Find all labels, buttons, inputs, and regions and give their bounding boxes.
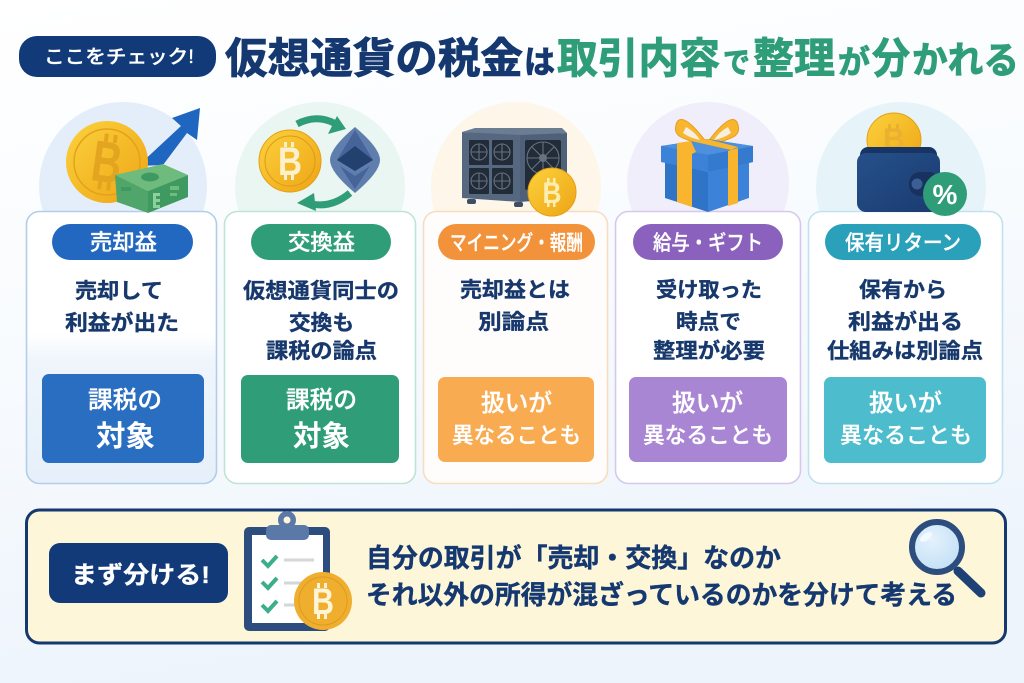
description: 整理が必要	[653, 339, 765, 363]
description: 受け取った	[656, 279, 762, 302]
tag: 給与・ギフト	[653, 232, 763, 255]
icon: exchange BTC and ETH	[259, 116, 380, 211]
icon: coin with rising arrow and cash	[66, 108, 200, 213]
result box: 異なることも	[452, 423, 581, 448]
icon: gift box	[661, 120, 753, 212]
icon: wallet with coin and percent: %	[933, 179, 958, 210]
description: 交換も	[289, 312, 354, 335]
icon: wallet with coin and percent	[857, 113, 967, 216]
main message: それ以外の所得が混ざっているのかを分けて考える	[366, 580, 957, 610]
title: 整理	[753, 35, 835, 82]
result box	[438, 377, 594, 462]
title: 分	[872, 35, 910, 82]
title: は	[524, 44, 555, 80]
title: かれる	[912, 40, 1019, 81]
card	[616, 212, 800, 484]
description: 利益が出た	[65, 311, 179, 335]
result box: 扱いが	[869, 390, 942, 417]
description: 利益が出る	[848, 310, 963, 334]
tag	[438, 224, 595, 260]
description	[653, 279, 765, 363]
panel: 保有リターン	[808, 113, 1002, 484]
result box: 異なることも	[643, 423, 773, 448]
description	[243, 279, 399, 363]
result box: 異なることも	[840, 423, 972, 448]
title: が	[838, 44, 870, 80]
main message: 自分の取引が「売却・交換」なのか	[366, 543, 781, 573]
description	[65, 280, 179, 335]
result box	[629, 377, 787, 462]
result box: 扱いが	[672, 390, 743, 417]
panel: マイニング・報酬	[424, 128, 608, 484]
icon: clipboard with checks and coin	[244, 511, 352, 631]
tag	[825, 224, 981, 260]
tag	[251, 224, 391, 260]
description: 時点で	[676, 311, 741, 334]
tag	[633, 224, 783, 260]
callout: bottom panel	[26, 510, 1006, 643]
icon: mining machine with coin: B	[542, 177, 562, 210]
title: で	[723, 47, 750, 80]
description: 売却して	[75, 280, 163, 303]
tag: 売却益	[90, 230, 157, 255]
icon: magnifying glass	[912, 522, 981, 593]
result box: 課税の	[88, 387, 162, 414]
description: 課税の論点	[266, 340, 377, 363]
icon: wallet with coin and percent: B	[883, 123, 905, 156]
icon: mining machine with coin	[462, 128, 576, 216]
card	[808, 212, 1002, 484]
badge: ここをチェック	[19, 36, 216, 77]
description: 仮想通貨同士の	[243, 279, 399, 303]
title: 取引内容	[557, 35, 720, 82]
main message	[366, 543, 957, 610]
result box	[241, 375, 399, 463]
icon backdrop circles	[39, 102, 986, 272]
button: まず分ける: まず分ける!	[71, 562, 210, 589]
icon: exchange BTC and ETH: B	[278, 140, 302, 184]
card	[26, 212, 216, 484]
result box: 対象	[96, 420, 155, 453]
card	[424, 212, 608, 484]
panel: 売却益	[26, 108, 216, 484]
description: 保有から	[859, 279, 947, 302]
description	[827, 279, 983, 363]
tag: 交換益	[288, 230, 355, 255]
description: 別論点	[478, 311, 549, 334]
title	[225, 35, 1019, 82]
result box: 対象	[293, 420, 350, 453]
result box	[824, 377, 986, 463]
tag	[52, 224, 193, 260]
title: 仮想通貨の税金	[225, 35, 523, 82]
description: 売却益とは	[460, 279, 570, 302]
panel: 交換益	[224, 116, 416, 484]
badge: ここをチェック: ここをチェック!	[44, 46, 194, 68]
button: まず分ける	[49, 543, 228, 603]
icon: coin with rising arrow and cash: B	[88, 128, 126, 197]
description	[460, 279, 570, 334]
result box	[42, 374, 204, 463]
result box: 課税の	[286, 387, 357, 414]
card	[224, 212, 416, 484]
tag: マイニング・報酬	[450, 232, 583, 255]
description: 仕組みは別論点	[827, 340, 983, 363]
icon: clipboard with checks and coin: B	[312, 581, 334, 622]
panel: 給与・ギフト	[616, 120, 800, 484]
result box: 扱いが	[481, 390, 552, 417]
tag: 保有リターン	[845, 232, 961, 255]
